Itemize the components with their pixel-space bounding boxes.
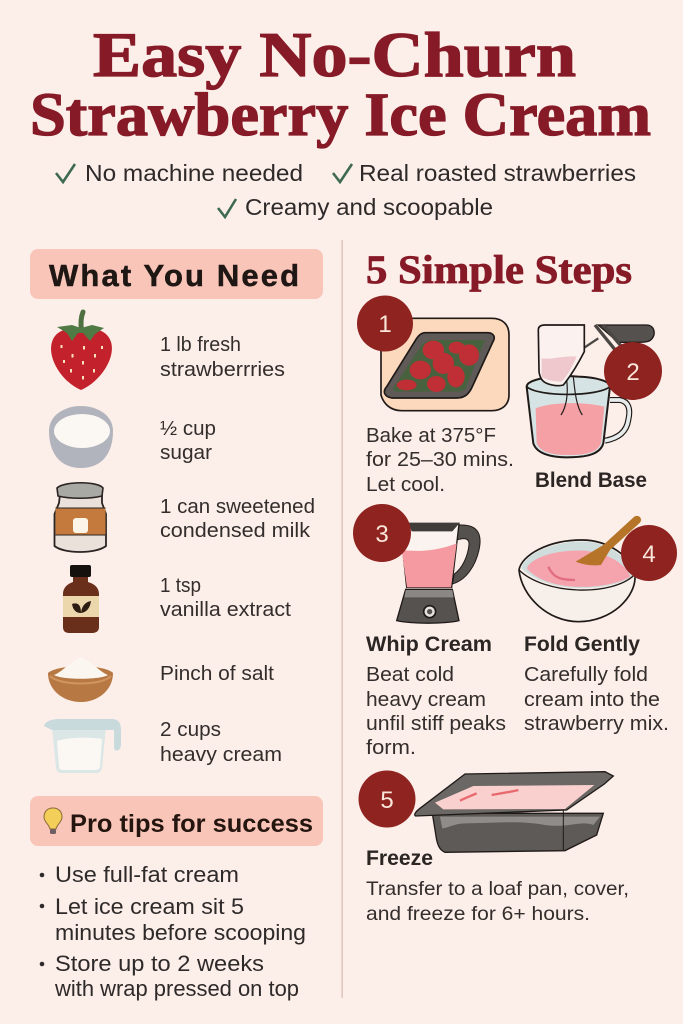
number badge 1: 1 bbox=[378, 311, 392, 338]
illustration: blender bbox=[397, 523, 480, 623]
ingredient list: 1 lb fresh bbox=[160, 333, 241, 356]
number badge 3: 3 bbox=[375, 521, 389, 548]
ingredient list: heavy cream bbox=[160, 743, 282, 766]
benefits checklist: Real roasted strawberries bbox=[359, 160, 636, 186]
heading: pro tips bbox=[30, 796, 323, 846]
title bbox=[30, 19, 651, 149]
number badge 2: 2 bbox=[626, 359, 640, 386]
step 4 text: Carefully fold bbox=[524, 663, 648, 686]
illustration: loaf pan bbox=[415, 772, 613, 852]
step 3 bbox=[353, 504, 506, 759]
illustration: pouring into glass cup bbox=[527, 325, 654, 457]
step 5 text: and freeze for 6+ hours. bbox=[366, 903, 590, 925]
step 5 text: Freeze bbox=[366, 847, 433, 870]
benefits checklist: No machine needed bbox=[85, 160, 303, 186]
icon: light bulb bbox=[44, 808, 62, 834]
step 1 text: Bake at 375°F bbox=[366, 424, 496, 447]
step 4 text: cream into the bbox=[524, 688, 660, 711]
pro tips list: Use full-fat cream bbox=[55, 862, 239, 887]
ingredient list: 2 cups bbox=[160, 718, 221, 741]
step 3 text: heavy cream bbox=[366, 688, 486, 711]
heading: 5 simple steps: 5 Simple Steps bbox=[366, 247, 632, 292]
step 5 text bbox=[366, 847, 629, 925]
step 1 text: for 25–30 mins. bbox=[366, 448, 514, 471]
number badge 2 bbox=[604, 342, 662, 400]
step 5 text: Transfer to a loaf pan, cover, bbox=[366, 878, 629, 900]
number badge 1 bbox=[357, 296, 413, 352]
ingredient list: strawberrries bbox=[160, 358, 285, 381]
number badge 3 bbox=[353, 504, 411, 562]
pro tips list: Store up to 2 weeks bbox=[55, 951, 264, 976]
ingredient list bbox=[160, 333, 315, 766]
icon: condensed milk jar bbox=[54, 483, 106, 552]
step 1 text: Let cool. bbox=[366, 473, 445, 496]
ingredient list: vanilla extract bbox=[160, 598, 291, 621]
pro tips list: with wrap pressed on top bbox=[54, 976, 299, 1001]
number badge 5: 5 bbox=[380, 787, 394, 814]
icon: measuring cup bbox=[44, 719, 121, 773]
step 4 text: Fold Gently bbox=[524, 633, 640, 656]
ingredient list: 1 tsp bbox=[160, 574, 201, 597]
step 2 bbox=[527, 325, 662, 492]
step 3 text: unfil stiff peaks bbox=[366, 712, 506, 735]
illustration: strawberries on baking tray bbox=[381, 318, 509, 411]
ingredient list: 1 can sweetened bbox=[160, 495, 315, 518]
step 3 text bbox=[366, 633, 506, 759]
pro tips list: Let ice cream sit 5 bbox=[55, 894, 244, 919]
step 4 text: strawberry mix. bbox=[524, 712, 669, 735]
step 3 text: Beat cold bbox=[366, 663, 454, 686]
ingredient list: sugar bbox=[160, 441, 212, 464]
title: Strawberry Ice Cream bbox=[30, 82, 651, 149]
pro tips list: minutes before scooping bbox=[55, 920, 306, 945]
icon: salt bowl bbox=[48, 657, 113, 702]
pro tips list bbox=[40, 862, 306, 1001]
step 1 bbox=[357, 296, 514, 496]
number badge 4 bbox=[621, 525, 677, 581]
step 3 text: Whip Cream bbox=[366, 633, 492, 656]
benefits checklist: Creamy and scoopable bbox=[245, 194, 493, 220]
step 4 bbox=[519, 516, 677, 735]
number badge 5 bbox=[358, 770, 416, 828]
ingredient list: condensed milk bbox=[160, 519, 311, 542]
step 3 text: form. bbox=[366, 736, 416, 759]
heading: what you need: What You Need bbox=[49, 258, 299, 293]
ingredient list: ½ cup bbox=[160, 417, 216, 440]
icon: strawberry bbox=[51, 312, 112, 390]
icon: sugar bowl bbox=[49, 406, 113, 468]
ingredient list: Pinch of salt bbox=[160, 662, 274, 685]
heading: what you need bbox=[30, 249, 323, 299]
step 4 text bbox=[524, 633, 669, 735]
title: Easy No-Churn bbox=[93, 19, 576, 90]
step 5 bbox=[358, 770, 629, 925]
step 2 label: Blend Base bbox=[535, 469, 647, 492]
benefits checklist bbox=[56, 160, 636, 220]
heading: pro tips: Pro tips for success bbox=[70, 810, 313, 838]
icon: vanilla bottle bbox=[63, 565, 99, 633]
step 1 text bbox=[366, 424, 514, 496]
number badge 4: 4 bbox=[642, 541, 656, 568]
illustration: bowl with spatula bbox=[519, 516, 641, 622]
